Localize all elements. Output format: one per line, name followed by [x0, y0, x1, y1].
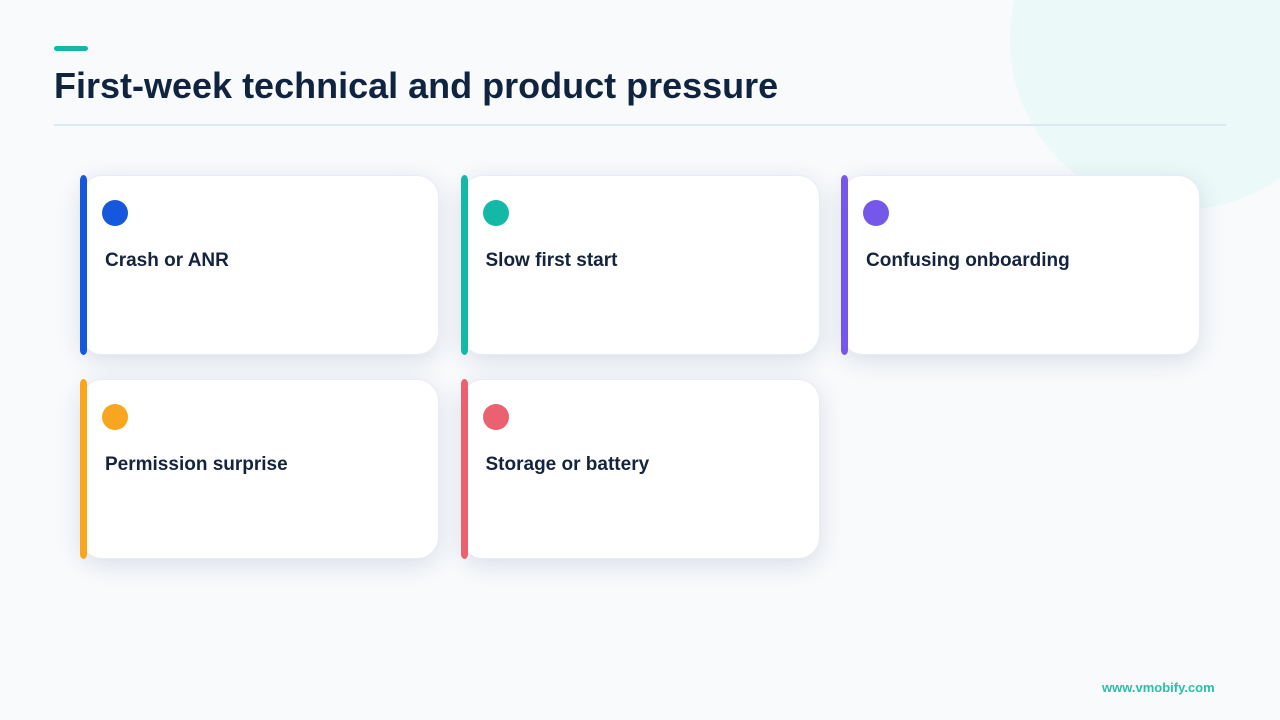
icon: blue dot [102, 200, 128, 226]
icon: teal dot [482, 200, 508, 226]
icon: purple dot [863, 200, 889, 226]
title: First-week technical and product pressure [54, 65, 778, 106]
footer website link: www.vmobify.com [1102, 680, 1215, 695]
decorative background circle [1010, 0, 1280, 210]
label: Storage or battery: Storage or battery [486, 454, 649, 475]
panel: Confusing onboarding [834, 174, 1207, 368]
icon: red dot [482, 404, 508, 430]
panel: Permission surprise [73, 378, 446, 572]
panel: Crash or ANR [73, 174, 446, 368]
panel: Slow first start [454, 174, 827, 368]
icon: orange dot [102, 404, 128, 430]
label: Confusing onboarding: Confusing onboarding [866, 250, 1070, 271]
label: Slow first start: Slow first start [486, 250, 617, 271]
panel: Storage or battery [454, 378, 827, 572]
label: Crash or ANR: Crash or ANR [105, 250, 229, 271]
label: Permission surprise: Permission surprise [105, 454, 288, 475]
title accent bar [54, 46, 88, 51]
